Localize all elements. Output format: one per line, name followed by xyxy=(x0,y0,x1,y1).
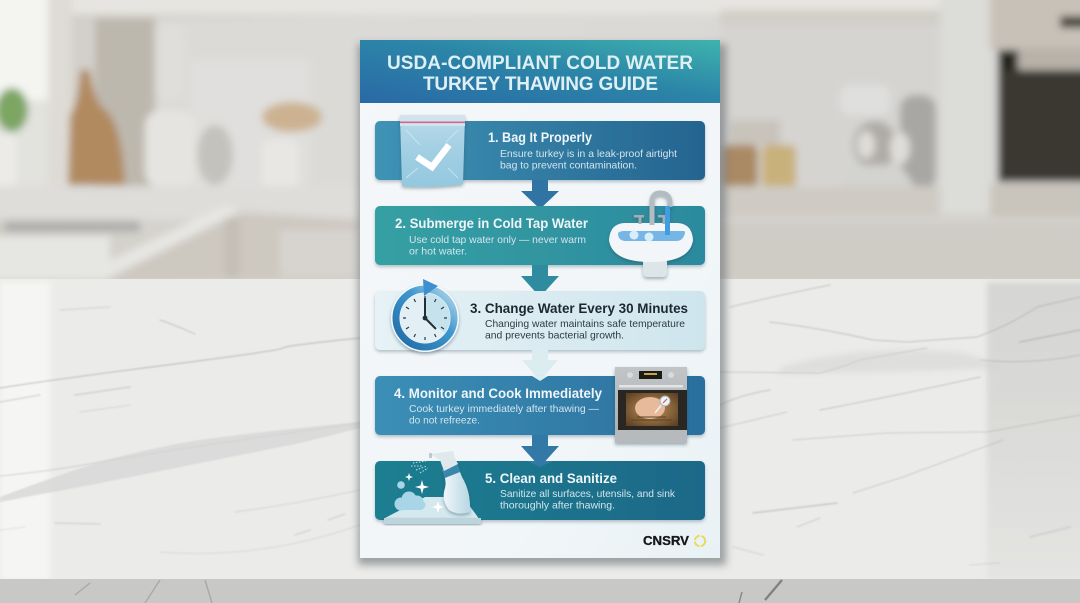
title: TURKEY THAWING GUIDE xyxy=(423,74,658,95)
step 2 card xyxy=(375,193,705,297)
icon: sink with running water xyxy=(609,193,693,277)
icon: clock with refresh arrow xyxy=(391,279,459,352)
brand logo: CNSRV xyxy=(643,533,689,548)
step 2 text: Use cold tap water only — never warm xyxy=(409,235,586,246)
icon: oven with turkey and thermometer xyxy=(615,367,687,443)
marble counter xyxy=(0,279,1080,580)
arrow: step 4 to 5 xyxy=(521,435,559,467)
blurred kitchen background xyxy=(0,0,1080,290)
arrow: step 1 to 2 xyxy=(521,180,559,209)
step 1 heading: 1. Bag It Properly xyxy=(488,130,592,145)
marble veins xyxy=(0,285,1080,565)
header band xyxy=(360,40,720,103)
poster background xyxy=(360,40,720,558)
step 4 text: Cook turkey immediately after thawing — xyxy=(409,404,600,415)
step 4 text: do not refreeze. xyxy=(409,416,480,426)
icon: spray bottle and foam on counter xyxy=(384,451,481,524)
arrow: step 2 to 3 xyxy=(521,265,559,297)
step 2 heading: 2. Submerge in Cold Tap Water xyxy=(395,216,589,231)
icon: sealed bag with check xyxy=(400,115,465,187)
step 1 text: bag to prevent contamination. xyxy=(500,160,637,172)
blue arrow tip over card xyxy=(527,461,553,467)
step 5 text: Sanitize all surfaces, utensils, and sink xyxy=(500,489,676,500)
step 2 text: or hot water. xyxy=(409,246,467,258)
step 5 card xyxy=(375,451,705,524)
soft grey marble band xyxy=(0,422,360,502)
step 5 heading: 5. Clean and Sanitize xyxy=(485,471,617,486)
step 5 text: thoroughly after thawing. xyxy=(500,500,615,512)
step 4 heading: 4. Monitor and Cook Immediately xyxy=(394,386,602,401)
step 3 card xyxy=(375,279,705,381)
title: USDA-COMPLIANT COLD WATER xyxy=(387,53,693,74)
counter front edge xyxy=(0,579,1080,603)
poster shadow xyxy=(358,44,726,565)
step 3 text: Changing water maintains safe temperature xyxy=(485,319,685,330)
step 4 card xyxy=(375,367,705,467)
step 3 heading: 3. Change Water Every 30 Minutes xyxy=(470,301,688,316)
step 1 card xyxy=(375,115,705,209)
step 3 text: and prevents bacterial growth. xyxy=(485,330,624,342)
arrow: step 3 to 4 xyxy=(522,350,558,381)
poster xyxy=(360,40,720,558)
light arrow tip over card xyxy=(532,376,548,381)
step 1 text: Ensure turkey is in a leak-proof airtight xyxy=(500,149,677,160)
